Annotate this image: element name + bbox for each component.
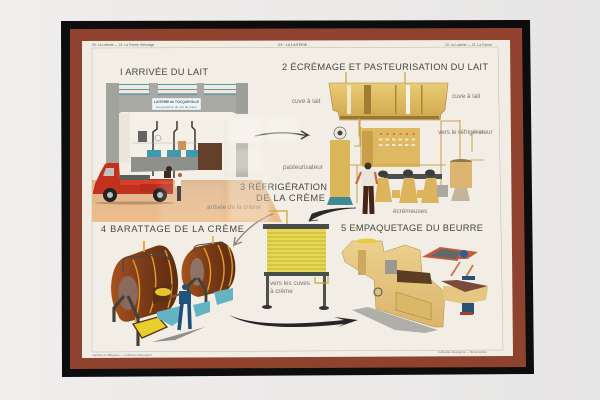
- poster header text: 20. La Laiterie — 21. La Ferme: [445, 43, 492, 47]
- milk tank: [329, 72, 448, 120]
- pipes: [350, 118, 484, 203]
- cream tank: [437, 159, 472, 201]
- refrigerator: [262, 224, 329, 310]
- cream pipe: [268, 211, 287, 224]
- floor: [92, 180, 282, 222]
- panel: écrémage et pasteurisation: [282, 62, 493, 215]
- print border: [92, 47, 503, 352]
- cream arrival label: arrivée de la crème: [207, 204, 261, 211]
- worker in blue: [152, 284, 205, 342]
- dairy sign: Coopérative du Val de Saire: [156, 105, 197, 109]
- pasteuriser panel: [362, 128, 420, 167]
- arrow: barattage to empaquetage: [229, 315, 358, 327]
- heading 2: 2 ÉCRÉMAGE ET PASTEURISATION DU LAIT: [282, 62, 488, 72]
- label cuves à crème: à crème: [270, 288, 293, 295]
- poster header text: XX · LA LAITERIE: [278, 43, 308, 47]
- poster paper: [82, 40, 513, 358]
- heading 4: 4 BARATTAGE DE LA CRÈME: [101, 224, 244, 234]
- footer credits: [92, 350, 487, 357]
- heading 3: [240, 182, 327, 203]
- panel: empaquetage du beurre: [341, 223, 488, 333]
- heading 1: I ARRIVÉE DU LAIT: [120, 67, 208, 77]
- labels section 2: pasteurisateur: [283, 164, 323, 171]
- labels section 2: vers le réfrigérateur: [438, 129, 493, 136]
- label cuves à crème: vers les cuves: [270, 280, 310, 287]
- blue butter bins: [157, 288, 233, 326]
- panel: arrivée du lait: [92, 67, 282, 222]
- panel: réfrigération de la crème: [207, 182, 329, 310]
- labels section 2: écrémeuses: [393, 208, 427, 215]
- poster header text: 20. La Laiterie — 21. La Ferme d'élevage: [92, 43, 154, 47]
- machine floor shadow: [352, 307, 438, 333]
- red truck: [93, 163, 175, 204]
- labels section 2: [283, 93, 493, 215]
- red-brown mat: [70, 28, 526, 369]
- panel: barattage de la crème: [101, 224, 244, 346]
- small churn: [182, 236, 235, 310]
- arrow: arrivée to écrémage: [255, 131, 308, 139]
- poster header text: [92, 43, 492, 47]
- dairy building: [106, 83, 248, 179]
- large churn: [111, 241, 178, 346]
- arrow: réfrigération to barattage: [234, 214, 273, 245]
- arrow: écrémage to réfrigération: [309, 208, 356, 221]
- heading 3: DE LA CRÈME: [256, 193, 325, 203]
- heading 5: 5 EMPAQUETAGE DU BEURRE: [341, 223, 483, 233]
- workers: [164, 166, 182, 201]
- heading 3: 3 RÉFRIGÉRATION: [240, 182, 327, 192]
- worker at pasteuriser: [356, 162, 377, 214]
- skimming machines: [375, 170, 442, 203]
- footer credits: Collection Rossignol — Montmorillon: [438, 350, 487, 354]
- dairy sign: [152, 98, 201, 110]
- packer: [451, 250, 475, 315]
- window light reflections: [160, 117, 296, 222]
- butter tray: [133, 317, 167, 338]
- labels section 2: cuve à lait: [452, 93, 481, 100]
- packing board: [422, 247, 478, 262]
- dairy sign: LAITERIE de TOCQUEVILLE: [154, 100, 200, 104]
- black frame: [61, 20, 534, 377]
- labels section 2: cuve à lait: [292, 98, 321, 105]
- pasteuriser cylinder: [327, 127, 353, 205]
- footer credits: Imprimé en Belgique — Collection Rossignol: [92, 353, 152, 357]
- packaging machine: [342, 238, 488, 327]
- label cuves à crème: [270, 280, 310, 295]
